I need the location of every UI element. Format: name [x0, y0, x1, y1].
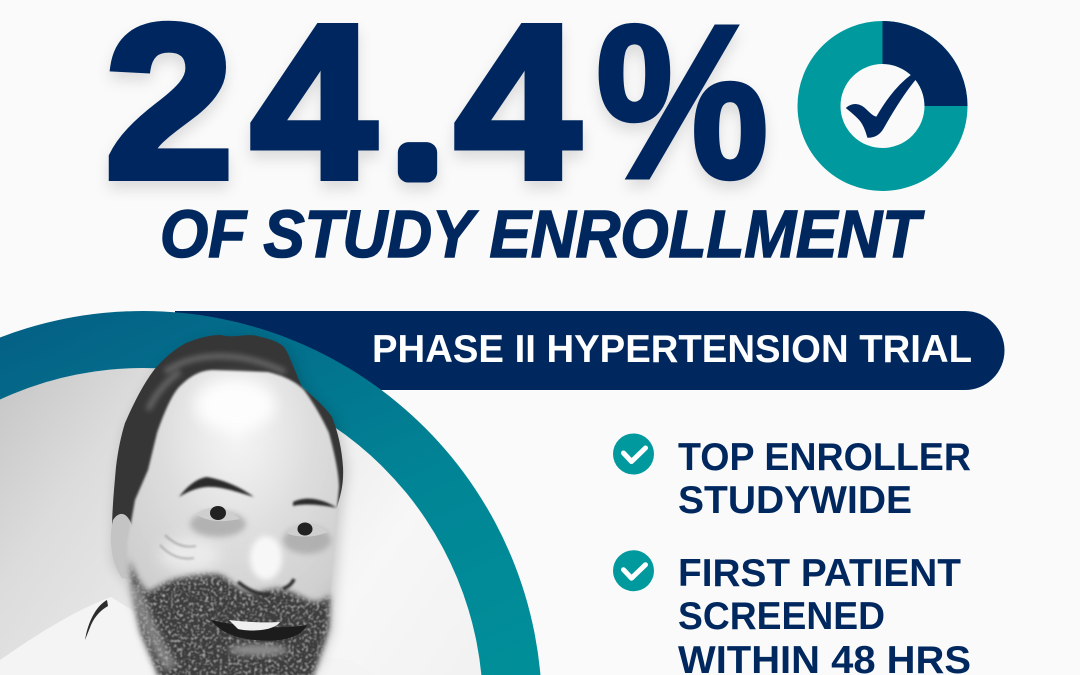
headline figure: 24.4%: [105, 0, 769, 224]
shirt: [0, 597, 152, 675]
hair highlights: [148, 356, 285, 410]
beard grey side: [134, 585, 172, 668]
eyes: [196, 508, 240, 521]
list item 1: TOP ENROLLER: [678, 436, 971, 479]
list item 2: [678, 552, 971, 675]
lanyard: [85, 600, 108, 640]
banner: phase II trial: PHASE II HYPERTENSION TRIAL: [372, 328, 972, 371]
icon: donut chart with check mark: [819, 21, 968, 170]
eye sockets: [190, 511, 246, 537]
mouth: [211, 620, 307, 641]
list item 2: SCREENED: [678, 595, 885, 638]
hair: [112, 335, 343, 532]
list item 2: FIRST PATIENT: [678, 552, 961, 595]
list item 1: [678, 436, 971, 522]
beard: [130, 560, 330, 675]
cheek light: [160, 538, 220, 572]
teal ring: [0, 311, 542, 675]
check list: [613, 434, 971, 675]
teeth: [229, 620, 280, 631]
face: [127, 370, 339, 675]
icon: check bullet 2: [613, 550, 654, 591]
banner: phase II trial: [175, 311, 1004, 390]
list item 1: STUDYWIDE: [678, 479, 912, 522]
portrait photo: [0, 335, 375, 675]
portrait disc: [0, 368, 483, 675]
brows: [179, 477, 254, 497]
wrinkles: [160, 535, 196, 558]
icon: check bullet 1: [613, 434, 654, 474]
chin patch: [228, 644, 288, 656]
forehead shine: [195, 379, 275, 431]
head shadow: [114, 338, 346, 675]
headline figure: 24.4%: .: [400, 54, 436, 200]
ear: [111, 514, 135, 580]
nose: [250, 536, 282, 580]
subheading: OF STUDY ENROLLMENT: [160, 197, 925, 272]
